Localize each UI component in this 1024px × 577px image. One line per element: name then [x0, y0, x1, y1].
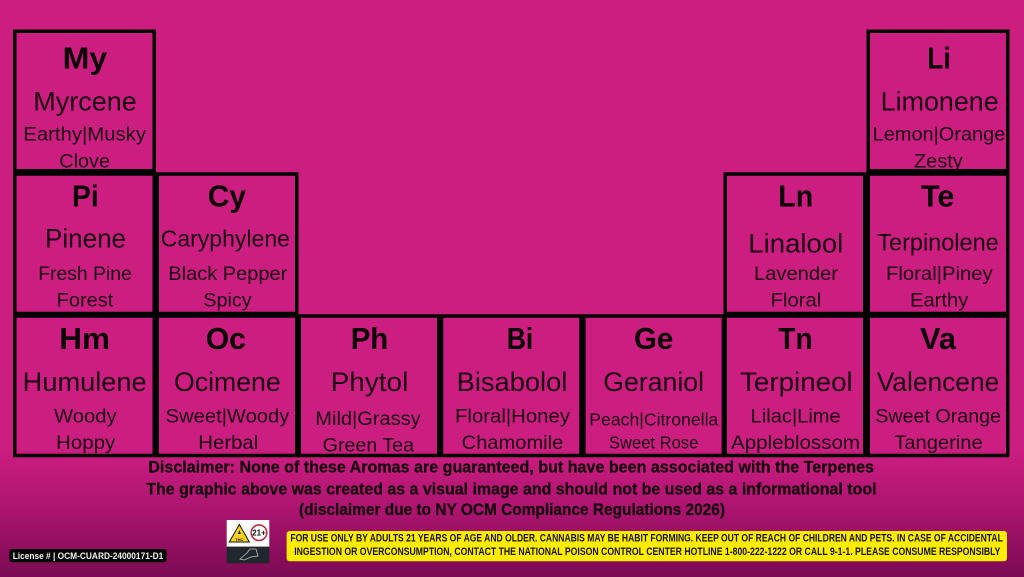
cell: Myrcene	[15, 31, 154, 172]
aromas: Peach|Citronella	[589, 410, 719, 430]
aromas: Lemon|Orange	[873, 124, 1005, 146]
name: Linalool: Linalool	[748, 229, 843, 259]
cell: Ocimene	[157, 316, 297, 456]
name: Terpinolene: Terpinolene	[877, 230, 999, 257]
icon: yellow THC warning triangle: THC	[235, 537, 244, 542]
name: Ocimene: Ocimene	[174, 367, 281, 397]
symbol: Te: Te	[921, 180, 954, 214]
aromas: Sweet Orange	[875, 405, 1001, 427]
symbol: My: My	[63, 41, 107, 75]
cell: Caryphylene	[157, 174, 297, 314]
aromas: Hoppy	[56, 432, 116, 454]
cell: Bisabolol	[442, 316, 581, 456]
aromas	[875, 405, 1001, 454]
disclaimer text block: The graphic above was created as a visual image and should not be used as a informational tool	[146, 480, 877, 498]
cell frame	[725, 174, 865, 314]
cell: Terpineol	[725, 316, 865, 456]
name: Myrcene: Myrcene	[33, 87, 137, 117]
disclaimer text block: (disclaimer due to NY OCM Compliance Regulations 2026)	[299, 501, 725, 519]
aromas: Chamomile	[462, 432, 563, 454]
name: Geraniol: Geraniol	[603, 367, 704, 397]
cell: Valencene	[868, 316, 1008, 456]
aromas	[38, 263, 132, 312]
symbol: Tn: Tn	[778, 322, 813, 356]
disclaimer text block	[146, 459, 877, 519]
aromas: Earthy|Musky	[23, 124, 146, 146]
symbol: Hm: Hm	[59, 322, 110, 356]
cell: Pinene	[15, 174, 154, 314]
aromas: Sweet|Woody	[166, 405, 290, 427]
aromas: Herbal	[198, 432, 258, 454]
symbol: Li: Li	[927, 41, 951, 75]
cell frame	[157, 316, 297, 456]
aromas: Fresh Pine	[38, 263, 132, 285]
license badge: License # | OCM-CUARD-24000171-D1	[13, 551, 164, 562]
symbol: Va: Va	[920, 322, 957, 356]
cell: Linalool	[725, 174, 865, 314]
cell frame	[299, 316, 439, 456]
aromas	[754, 263, 839, 312]
symbol: Bi: Bi	[507, 322, 533, 356]
aromas	[886, 263, 993, 312]
cell frame	[868, 174, 1008, 314]
aromas: Spicy	[203, 290, 252, 312]
name: Phytol: Phytol	[331, 367, 408, 397]
cell: Humulene	[15, 316, 154, 456]
name: Bisabolol: Bisabolol	[457, 367, 567, 397]
aromas	[54, 405, 117, 454]
symbol: Ph: Ph	[351, 322, 388, 356]
yellow warning banner	[287, 531, 1007, 561]
aromas: Forest	[57, 290, 114, 312]
aromas: Floral|Honey	[455, 405, 570, 427]
cell: Geraniol	[584, 316, 723, 456]
cell frame	[157, 174, 297, 314]
cell frame	[15, 174, 154, 314]
cell: Terpinolene	[868, 174, 1008, 314]
symbol: Pi: Pi	[72, 180, 99, 214]
aromas: Mild|Grassy	[315, 408, 421, 430]
name: Humulene: Humulene	[23, 367, 147, 397]
name: Terpineol: Terpineol	[740, 367, 853, 397]
aromas	[731, 405, 860, 454]
aromas: Woody	[54, 405, 117, 427]
name: Caryphylene: Caryphylene	[161, 226, 290, 252]
aromas: Tangerine	[894, 432, 983, 454]
aromas: Sweet Rose	[609, 432, 698, 452]
aromas	[166, 405, 290, 454]
cell frame	[868, 316, 1008, 456]
aromas	[315, 408, 421, 457]
name: Valencene: Valencene	[877, 367, 999, 397]
aromas: Green Tea	[323, 435, 414, 457]
symbol: Ln: Ln	[778, 180, 813, 214]
aromas	[589, 410, 719, 452]
icon: New York state outline	[240, 549, 258, 560]
aromas	[455, 405, 570, 454]
aromas: Lilac|Lime	[751, 405, 841, 427]
aromas: Zesty	[914, 150, 963, 172]
aromas: Floral	[771, 290, 821, 312]
panel: periodic table of terpenes	[15, 31, 1008, 457]
cell frame	[725, 316, 865, 456]
cell frame	[868, 31, 1008, 171]
cell frame	[584, 316, 723, 456]
cell frame	[442, 316, 581, 456]
cell: Limonene	[868, 31, 1008, 172]
symbol: Oc: Oc	[206, 322, 246, 356]
symbol: Ge: Ge	[634, 322, 673, 356]
aromas: Floral|Piney	[886, 263, 993, 285]
icon: THC and 21+ warning symbol	[227, 520, 269, 563]
name: Pinene: Pinene	[45, 224, 126, 254]
aromas: Appleblossom	[731, 432, 860, 454]
aromas	[873, 124, 1005, 172]
cell frame	[15, 31, 154, 171]
name: Limonene: Limonene	[881, 87, 999, 117]
aromas: Lavender	[754, 263, 839, 285]
aromas: Black Pepper	[168, 263, 288, 285]
aromas: Clove	[59, 150, 110, 172]
symbol: Cy: Cy	[208, 180, 246, 214]
icon: 21+ age circle: 21+	[252, 529, 266, 538]
cell: Phytol	[299, 316, 439, 457]
disclaimer text block: Disclaimer: None of these Aromas are guaranteed, but have been associated with the Terpenes	[148, 459, 874, 477]
aromas: Earthy	[910, 290, 969, 312]
aromas	[23, 124, 146, 172]
aromas	[168, 263, 288, 312]
cell frame	[15, 316, 154, 456]
